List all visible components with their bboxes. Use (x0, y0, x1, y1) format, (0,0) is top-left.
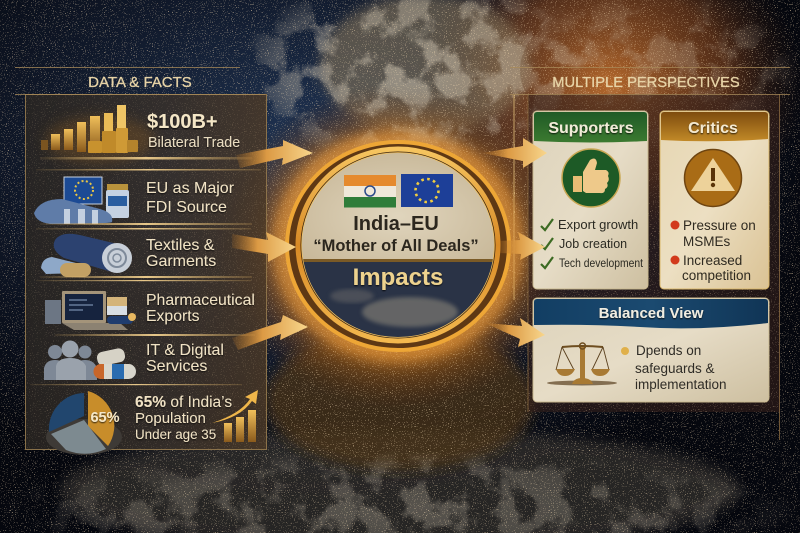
text: IT & Digital Services: Services (146, 358, 207, 375)
list: supporter points: Export growth (558, 217, 638, 232)
icon: fabric rolls (41, 234, 132, 277)
text: IT & Digital Services (146, 342, 224, 375)
heading: balanced view: Balanced View (599, 305, 704, 322)
heading: critics: Critics (688, 120, 738, 137)
icon: 65% pie chart: 65% (90, 410, 120, 426)
row: textiles and garments (36, 228, 252, 281)
list: supporter points (541, 217, 644, 270)
icon: India flag (344, 175, 396, 208)
arrow: centre to balanced view (485, 318, 545, 347)
heading: multiple perspectives: MULTIPLE PERSPECTIVES (552, 75, 740, 91)
row: IT and digital services (30, 340, 242, 385)
icon: EU flag (401, 174, 453, 207)
text: Pharmaceutical Exports: Exports (146, 308, 200, 325)
arrow: centre to job creation (500, 232, 545, 260)
title: India-EU Mother of All Deals: India–EU (353, 213, 439, 235)
title: India-EU Mother of All Deals: “Mother of All Deals” (313, 237, 479, 255)
icon: warning triangle (684, 150, 742, 206)
icon: thumbs up (562, 149, 620, 207)
heading: critics (661, 112, 768, 141)
heading: impacts: Impacts (353, 264, 443, 291)
icon: rising bars and arrow (212, 390, 258, 442)
panel: supporters (533, 111, 648, 289)
heading: supporters: Supporters (548, 120, 634, 137)
list: critic points (670, 218, 756, 283)
text: Textiles & Garments: Textiles & (146, 237, 215, 254)
list: critic points: Pressure on (683, 218, 756, 233)
text: depends on safeguards and implementation: Dpends on (636, 343, 701, 358)
panel: data and facts (15, 68, 267, 455)
text: 65% of India's Population Under age 35 (135, 394, 232, 442)
text: IT & Digital Services: IT & Digital (146, 342, 224, 359)
text: 65% of India's Population Under age 35: 65% of India’s (135, 394, 232, 411)
icon: 65% pie chart (46, 391, 122, 455)
title: India-EU Mother of All Deals (313, 213, 479, 255)
text: depends on safeguards and implementation: implementation (635, 377, 727, 392)
text: depends on safeguards and implementation: safeguards & (635, 361, 715, 376)
text: Pharmaceutical Exports: Pharmaceutical (146, 292, 255, 309)
text: 65% of India's Population Under age 35: Population (135, 410, 206, 427)
arrow: IT to centre (232, 315, 308, 350)
text: $100B+ Bilateral Trade (147, 111, 240, 151)
row: FDI source (34, 169, 261, 225)
text: depends on safeguards and implementation (621, 343, 727, 392)
panel: multiple perspectives (510, 68, 790, 440)
text: Textiles & Garments (146, 237, 216, 270)
heading: data and facts: DATA & FACTS (88, 74, 192, 91)
icon: people and capsules (44, 340, 136, 380)
arrow: centre to supporters (482, 138, 547, 168)
icon: gold bars and coins (41, 105, 138, 153)
icon: EU flag laptop, textile and jar (34, 177, 129, 224)
list: critic points: Increased (683, 253, 742, 268)
arrow: textiles to centre (232, 232, 296, 262)
arrow: trade to centre (236, 140, 313, 168)
list: critic points: MSMEs (683, 234, 730, 249)
central badge: India-EU deal (274, 130, 522, 362)
row: population under 35 (46, 390, 258, 455)
row: bilateral trade (40, 105, 252, 164)
heading: balanced view (534, 299, 768, 328)
heading: supporters (534, 112, 647, 142)
text: $100B+ Bilateral Trade: Bilateral Trade (148, 135, 240, 151)
list: critic points: competition (682, 268, 751, 283)
text: EU as Major FDI Source: FDI Source (146, 199, 227, 216)
text: Pharmaceutical Exports (146, 292, 255, 325)
panel: critics (660, 111, 769, 289)
text: EU as Major FDI Source: EU as Major (146, 180, 235, 197)
list: supporter points: Job creation (559, 237, 627, 251)
text: 65% of India's Population Under age 35: Under age 35 (135, 427, 216, 442)
icon: laptop and pills (45, 291, 136, 330)
list: supporter points: Tech development (559, 256, 644, 270)
text: Textiles & Garments: Garments (146, 253, 216, 270)
text: EU as Major FDI Source (146, 180, 235, 216)
icon: scales of justice (547, 343, 617, 386)
text: $100B+ Bilateral Trade: $100B+ (147, 111, 218, 133)
panel: balanced view (533, 298, 769, 402)
row: pharmaceutical exports (45, 291, 255, 336)
